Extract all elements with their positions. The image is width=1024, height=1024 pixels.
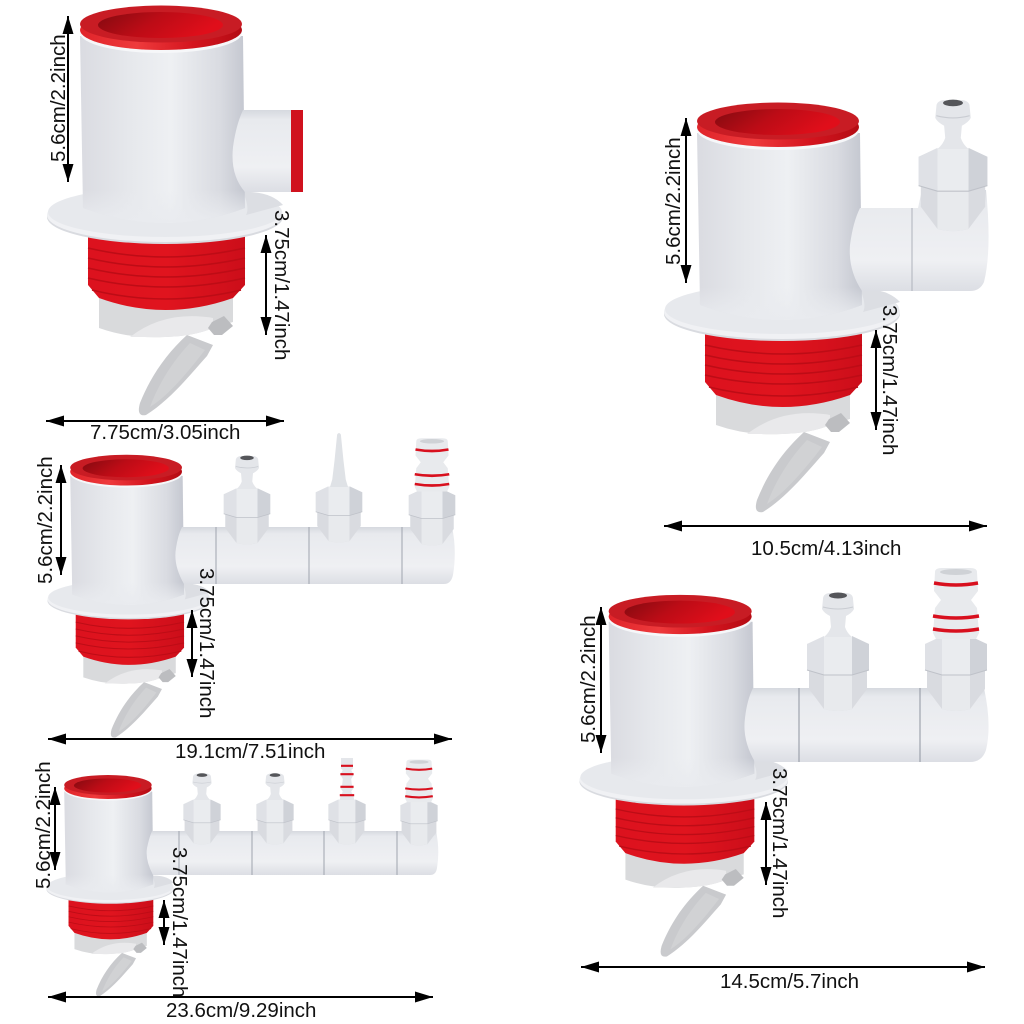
- height arrow: [600, 607, 602, 753]
- width label: 10.5cm/4.13inch: [751, 537, 901, 560]
- coupling with red rings: [400, 760, 438, 845]
- thread arrow: [875, 330, 877, 430]
- thread arrow: [191, 610, 193, 677]
- height arrow: [60, 465, 62, 575]
- quick connector: [224, 456, 270, 544]
- main body: [47, 455, 210, 738]
- width label: 19.1cm/7.51inch: [175, 740, 325, 763]
- dimensions: two-outlet: [577, 607, 985, 993]
- red barbed connector: [328, 758, 366, 844]
- main body: [47, 6, 283, 415]
- product: four-outlet manifold: [46, 758, 438, 996]
- manifold pipe: [147, 831, 438, 875]
- width arrow: [48, 996, 433, 998]
- width arrow: [664, 525, 987, 527]
- height label: 5.6cm/2.2inch: [34, 456, 57, 584]
- width label: 23.6cm/9.29inch: [166, 999, 316, 1022]
- thread label: 3.75cm/1.47inch: [768, 768, 791, 918]
- width arrow: [581, 966, 985, 968]
- product: two-outlet manifold: [580, 568, 989, 957]
- thread arrow: [163, 900, 165, 945]
- product: elbow with quick connector: [664, 100, 989, 512]
- thread label: 3.75cm/1.47inch: [270, 210, 293, 360]
- product: three-outlet manifold: [47, 433, 455, 738]
- width label: 7.75cm/3.05inch: [90, 421, 240, 444]
- manifold pipe: [744, 688, 989, 762]
- thread arrow: [765, 802, 767, 885]
- dimensions: elbow: [662, 118, 987, 560]
- width arrow: [48, 738, 452, 740]
- coupling with red rings: [925, 568, 987, 711]
- main body: [580, 595, 788, 957]
- width label: 14.5cm/5.7inch: [720, 970, 859, 993]
- manifold pipe: [175, 527, 455, 584]
- height arrow: [685, 118, 687, 283]
- dimensions: four-outlet: [32, 761, 433, 1022]
- quick connector: [919, 100, 987, 231]
- thread label: 3.75cm/1.47inch: [878, 305, 901, 455]
- side outlet pipe: [232, 110, 303, 192]
- quick connector 2: [256, 773, 294, 844]
- dimensions: single outlet: [46, 16, 293, 444]
- thread label: 3.75cm/1.47inch: [195, 568, 218, 718]
- height label: 5.6cm/2.2inch: [662, 137, 685, 265]
- quick connector 1: [183, 773, 221, 844]
- elbow pipe: [850, 190, 989, 291]
- product: single outlet fitting: [47, 6, 303, 415]
- main body: [46, 775, 174, 996]
- main body: [664, 102, 900, 512]
- dimensions: three-outlet: [34, 456, 452, 763]
- coupling with red rings: [409, 438, 455, 546]
- thread arrow: [265, 235, 267, 335]
- barbed connector: [316, 433, 362, 542]
- thread label: 3.75cm/1.47inch: [168, 847, 191, 997]
- height label: 5.6cm/2.2inch: [47, 34, 70, 162]
- width arrow: [46, 420, 284, 422]
- quick connector: [807, 592, 869, 711]
- height arrow: [67, 16, 69, 182]
- height label: 5.6cm/2.2inch: [577, 615, 600, 743]
- height arrow: [54, 787, 56, 870]
- height label: 5.6cm/2.2inch: [32, 761, 55, 889]
